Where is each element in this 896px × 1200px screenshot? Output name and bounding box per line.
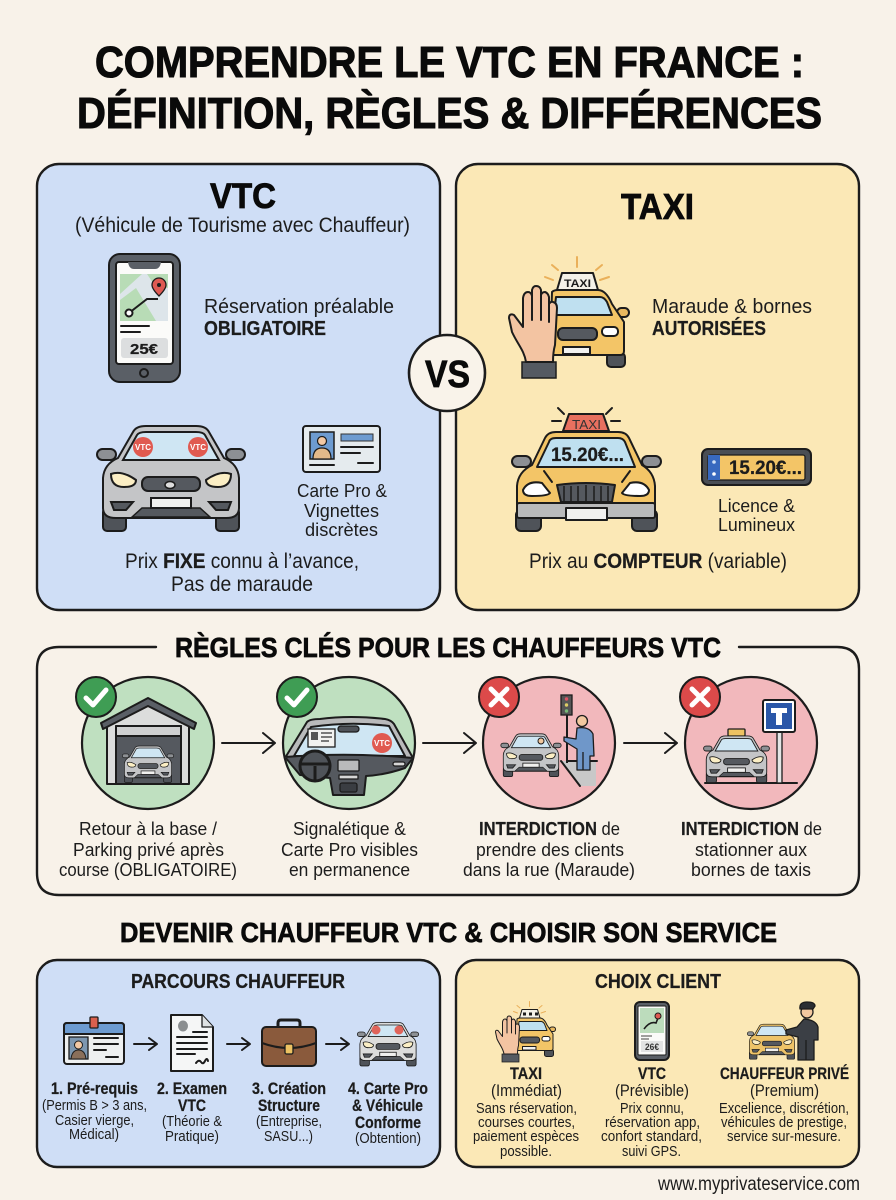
icon: dashboard: VTC (374, 739, 390, 748)
text: rule 1 (59, 818, 237, 880)
chauffeur choice text: Excelience, discrétion, (719, 1101, 849, 1117)
icon: VTC car (97, 426, 245, 531)
VTC choice text: confort standard, (601, 1129, 702, 1145)
step 3 text (252, 1080, 326, 1145)
text: rule 1: Retour à la base / (79, 818, 218, 839)
icon: ID badge (64, 1017, 124, 1064)
icon: taxi meter plate: 15.20€... (729, 458, 802, 479)
rule 4: no taxi stand (680, 677, 822, 880)
icon: small phone (635, 1002, 669, 1060)
panel: client choice (456, 960, 859, 1167)
chauffeur choice text (719, 1064, 849, 1145)
text: rule 2: Carte Pro visibles (281, 839, 418, 860)
step 3 text: 3. Création (252, 1080, 326, 1098)
VTC choice text: réservation app, (605, 1115, 700, 1131)
arrow 1 (222, 733, 275, 753)
text: hailing: Maraude & bornes (652, 296, 812, 318)
text: VTC pricing: Pas de maraude (171, 573, 313, 596)
text: rule 2: Signalétique & (293, 818, 407, 839)
text: licence caption: Licence & (718, 496, 795, 516)
text: rule 1: course (OBLIGATOIRE) (59, 859, 237, 880)
icon: taxi stand sign (704, 700, 797, 783)
text: card caption: Carte Pro & (297, 481, 387, 501)
heading: rules: RÈGLES CLÉS POUR LES CHAUFFEURS VTC (175, 632, 721, 663)
badge: cross (680, 677, 720, 717)
taxi choice text: courses courtes, (478, 1115, 575, 1131)
icon: briefcase (262, 1020, 316, 1066)
step 1 text: Casier vierge, (55, 1113, 134, 1129)
icon: yellow taxi with meter: TAXI (572, 417, 601, 432)
step 3 text: (Entreprise, (256, 1114, 322, 1130)
icon: hand hailing taxi: TAXI (564, 278, 591, 290)
VTC choice text: suivi GPS. (622, 1144, 681, 1160)
step 4 text: Conforme (355, 1114, 421, 1132)
step 1 text: Médical) (69, 1127, 119, 1143)
text: rule 3: INTERDICTION de (479, 818, 620, 839)
icon: yellow taxi with meter (512, 408, 661, 531)
taxi choice text: Sans réservation, (476, 1101, 577, 1117)
panel: VTC (37, 164, 440, 610)
arrow (326, 1038, 349, 1050)
taxi choice text: (Immédiat) (491, 1081, 562, 1100)
arrow 2 (423, 733, 476, 753)
text: rule 4: bornes de taxis (691, 859, 811, 880)
step 4 text (348, 1080, 428, 1147)
heading: VTC: VTC (210, 177, 276, 216)
step 3 text: Structure (258, 1097, 320, 1115)
step 1 text (42, 1080, 147, 1143)
text: VTC pricing (125, 550, 359, 596)
icon: small phone: 26€ (645, 1042, 659, 1052)
icon: taxi meter plate (702, 449, 811, 485)
VTC choice text: (Prévisible) (615, 1081, 689, 1100)
icon: VTC car: VTC (135, 443, 151, 452)
text: VTC pricing: Prix FIXE connu à l’avance, (125, 550, 359, 573)
text: licence caption: Lumineux (718, 515, 795, 535)
text: obligatoire: OBLIGATOIRE (204, 318, 326, 340)
subtitle: VTC definition: (Véhicule de Tourisme avec Chauffeur) (75, 214, 410, 237)
text: rule 3 (463, 818, 635, 880)
title: COMPRENDRE LE VTC EN FRANCE : (95, 38, 804, 87)
rule 3: no street pickup (463, 677, 635, 880)
VTC choice text (601, 1064, 702, 1160)
icon: professional card (303, 426, 380, 472)
icon: dashboard (285, 717, 413, 795)
text: rule 4: INTERDICTION de (681, 818, 822, 839)
taxi choice text (473, 1064, 579, 1160)
taxi choice text: possible. (500, 1144, 552, 1160)
icon: private chauffeur (747, 1002, 818, 1060)
icon: street pickup scene (501, 695, 597, 786)
icon: smartphone booking: 25€ (130, 342, 158, 358)
text: authorised: AUTORISÉES (652, 317, 766, 340)
text: rule 3: prendre des clients (476, 839, 624, 860)
icon: compliant car (357, 1023, 419, 1066)
text: card caption (297, 481, 387, 540)
footer: website: www.myprivateservice.com (657, 1174, 860, 1195)
step 2 text: 2. Examen (157, 1080, 227, 1098)
step 2 text: VTC (178, 1097, 206, 1115)
step 2 text (157, 1080, 227, 1145)
arrow 3 (624, 733, 677, 753)
heading: client choice: CHOIX CLIENT (595, 971, 721, 993)
arrow (227, 1038, 250, 1050)
badge: check (76, 677, 116, 717)
taxi choice text: TAXI (510, 1064, 542, 1083)
icon: VTC car: VTC (190, 443, 206, 452)
step 4 text: & Véhicule (352, 1097, 423, 1115)
VTC choice text: VTC (638, 1064, 666, 1083)
text: rule 4 (681, 818, 822, 880)
title (77, 38, 822, 138)
badge: VS: VS (425, 354, 470, 396)
text: licence caption (718, 496, 795, 535)
text: rule 2: en permanence (289, 859, 410, 880)
badge: VS (409, 335, 485, 411)
panel: rules (37, 632, 859, 895)
title: DÉFINITION, RÈGLES & DIFFÉRENCES (77, 88, 822, 138)
text: rule 2 (281, 818, 418, 880)
step 3 text: SASU...) (264, 1129, 313, 1145)
icon: hand hailing taxi (509, 257, 629, 378)
icon: exam document (171, 1015, 213, 1071)
text: rule 4: stationner aux (695, 839, 808, 860)
text: card caption: Vignettes (304, 501, 379, 521)
step 1 text: 1. Pré-requis (51, 1080, 138, 1098)
VTC choice text: Prix connu, (620, 1101, 684, 1117)
heading: TAXI: TAXI (621, 186, 694, 227)
icon: yellow taxi with meter: 15.20€... (551, 445, 624, 466)
heading: become a driver: DEVENIR CHAUFFEUR VTC & CHOISIR SON SERVICE (120, 917, 777, 948)
chauffeur choice text: véhicules de prestige, (721, 1115, 847, 1131)
rule 1: garage (59, 677, 237, 880)
chauffeur choice text: service sur-mesure. (727, 1129, 841, 1145)
step 2 text: Pratique) (165, 1129, 219, 1145)
text: card caption: discrètes (305, 520, 378, 540)
badge: cross (479, 677, 519, 717)
step 4 text: 4. Carte Pro (348, 1080, 428, 1098)
step 1 text: (Permis B > 3 ans, (42, 1098, 147, 1114)
text: rule 3: dans la rue (Maraude) (463, 859, 635, 880)
panel: TAXI (456, 164, 859, 610)
badge: check (277, 677, 317, 717)
icon: garage (101, 698, 196, 784)
taxi choice text: paiement espèces (473, 1129, 579, 1145)
text: rule 1: Parking privé après (73, 839, 224, 860)
text: booking: Réservation préalable (204, 296, 394, 318)
text: taxi pricing: Prix au COMPTEUR (variable) (529, 550, 787, 573)
chauffeur choice text: CHAUFFEUR PRIVÉ (720, 1064, 849, 1083)
rule 2: dashboard (277, 677, 418, 880)
arrow (134, 1038, 157, 1050)
step 2 text: (Théorie & (162, 1114, 222, 1130)
heading: driver path: PARCOURS CHAUFFEUR (131, 971, 345, 993)
step 4 text: (Obtention) (355, 1131, 421, 1147)
icon: small hand and taxi (496, 1002, 556, 1062)
icon: smartphone booking (109, 254, 180, 382)
chauffeur choice text: (Premium) (750, 1081, 819, 1100)
panel: driver path (37, 960, 440, 1167)
